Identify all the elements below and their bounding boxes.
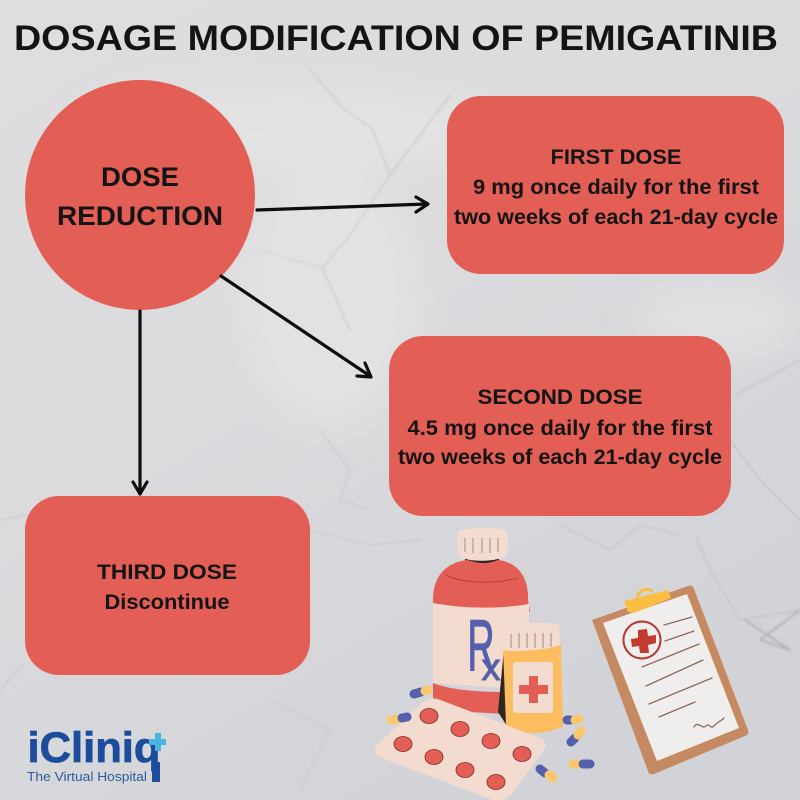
circle: dose reduction <box>25 80 255 310</box>
arrow: to first dose <box>257 197 428 212</box>
illustration: medicine bottles and blister pack <box>375 528 590 800</box>
logo: iCliniq: The Virtual Hospital <box>27 770 147 784</box>
panel: first dose: two weeks of each 21-day cycle <box>454 206 778 229</box>
panel: second dose: SECOND DOSE <box>478 385 642 409</box>
arrow: to third dose <box>133 311 147 494</box>
icon: large Rx bottle: x <box>482 647 500 689</box>
panel: second dose <box>389 336 731 516</box>
logo: iCliniq: iCliniq <box>28 724 160 772</box>
icon: large Rx bottle <box>433 528 530 714</box>
circle: dose reduction: REDUCTION <box>57 201 223 231</box>
panel: third dose <box>25 496 310 675</box>
title: DOSAGE MODIFICATION OF PEMIGATINIB <box>14 19 778 58</box>
Rx glyph: R <box>468 606 494 686</box>
panel: second dose: two weeks of each 21-day cycle <box>398 446 722 469</box>
icon: logo plus <box>149 733 166 751</box>
panel: first dose <box>447 96 784 274</box>
icon: capsules <box>391 690 590 778</box>
panel: first dose: 9 mg once daily for the first <box>473 176 759 199</box>
icon: blister pack <box>375 698 546 800</box>
panel: third dose: THIRD DOSE <box>97 560 237 584</box>
arrow: to second dose <box>221 276 371 377</box>
illustration: medical clipboard <box>592 586 748 774</box>
panel: third dose: Discontinue <box>104 591 230 614</box>
panel: second dose: 4.5 mg once daily for the first <box>408 417 713 440</box>
icon: small yellow bottle <box>498 623 563 733</box>
circle: dose reduction: DOSE <box>101 162 179 192</box>
panel: first dose: FIRST DOSE <box>550 145 682 169</box>
